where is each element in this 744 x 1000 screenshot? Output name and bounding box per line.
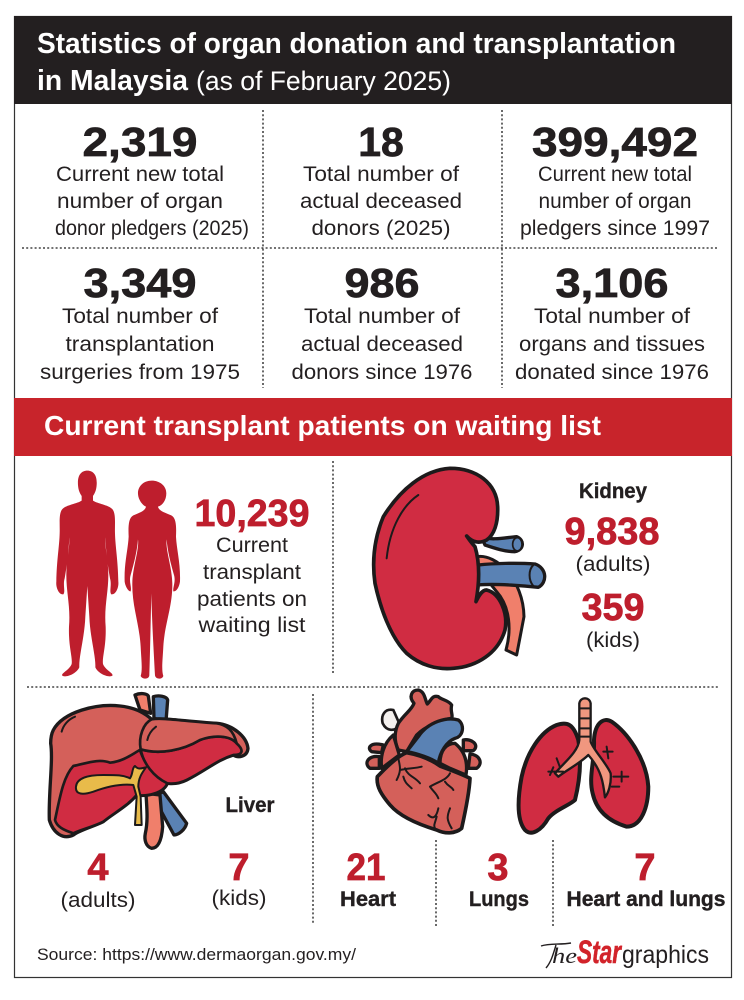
stat: total waiting patients: 10,239 bbox=[194, 493, 310, 535]
stat: liver bbox=[60, 794, 274, 912]
stat: organs and tissues donated: Total number of bbox=[534, 305, 690, 328]
stat: kidney: (adults) bbox=[576, 553, 650, 576]
title banner: in Malaysia bbox=[37, 65, 189, 97]
stat: lungs bbox=[469, 847, 529, 911]
stat: liver: (kids) bbox=[212, 887, 266, 910]
logo: The Star graphics: graphics bbox=[622, 941, 709, 969]
stat: liver: 4 bbox=[87, 847, 109, 889]
stat: heart and lungs: Heart and lungs bbox=[566, 888, 726, 911]
icon: kidney bbox=[374, 468, 545, 669]
stat: transplantation surgeries: transplantation bbox=[66, 333, 214, 356]
stat: liver: 7 bbox=[228, 847, 250, 889]
stat: organ pledgers since 1997: pledgers since 1997 bbox=[520, 217, 710, 240]
logo: The Star graphics bbox=[541, 934, 709, 970]
stat: organs and tissues donated bbox=[515, 260, 709, 384]
stat: organ pledgers since 1997: Current new total bbox=[538, 163, 692, 186]
stat: liver: (adults) bbox=[60, 889, 136, 912]
stat: heart: 21 bbox=[346, 847, 386, 889]
stat: kidney: (kids) bbox=[586, 629, 640, 652]
stat: total waiting patients: Current bbox=[216, 534, 288, 557]
stat: total waiting patients bbox=[194, 493, 310, 637]
stat: transplantation surgeries: surgeries from 1975 bbox=[40, 361, 240, 384]
stat: transplantation surgeries: Total number of bbox=[62, 305, 218, 328]
stat: lungs: Lungs bbox=[469, 888, 529, 911]
source: Source: https://www.dermaorgan.gov.my/ bbox=[37, 946, 356, 964]
stat: transplantation surgeries: 3,349 bbox=[84, 260, 196, 306]
stat: kidney: 9,838 bbox=[564, 511, 660, 553]
stat: heart: Heart bbox=[340, 888, 396, 911]
stat: organ donor pledgers 2025: Current new total bbox=[56, 163, 224, 186]
stat: organ pledgers since 1997: 399,492 bbox=[532, 119, 698, 165]
stat: deceased donors since 1976: Total number of bbox=[304, 305, 460, 328]
title banner bbox=[14, 16, 732, 104]
stat: organs and tissues donated: organs and tissues bbox=[519, 333, 705, 356]
icon: liver bbox=[49, 694, 248, 848]
stat: organ donor pledgers 2025: 2,319 bbox=[82, 119, 198, 165]
logo: The Star graphics: Star bbox=[577, 934, 622, 970]
stat: kidney bbox=[564, 480, 660, 652]
stat: lungs: 3 bbox=[487, 847, 509, 889]
stat: deceased donors since 1976 bbox=[292, 260, 472, 384]
stat: organ donor pledgers 2025: donor pledgers (2025) bbox=[55, 217, 249, 240]
title banner: (as of February 2025) bbox=[196, 66, 451, 96]
stat: organs and tissues donated: 3,106 bbox=[556, 260, 668, 306]
icon: human silhouettes bbox=[56, 471, 180, 679]
title banner: Statistics of organ donation and transplantation bbox=[37, 28, 676, 60]
stat: total waiting patients: waiting list bbox=[197, 614, 306, 637]
stat: heart bbox=[340, 847, 396, 911]
stat: deceased donors since 1976: actual deceased bbox=[301, 333, 463, 356]
stat: deceased donors since 1976: donors since 1976 bbox=[292, 361, 472, 384]
stat: liver: Liver bbox=[226, 794, 274, 817]
stat: organ pledgers since 1997 bbox=[520, 119, 710, 240]
waiting list banner bbox=[14, 398, 732, 456]
stat: organs and tissues donated: donated since 1976 bbox=[515, 361, 709, 384]
stat: actual deceased donors 2025: 18 bbox=[358, 119, 404, 165]
stat: organ donor pledgers 2025: number of organ bbox=[57, 190, 223, 213]
stat: total waiting patients: transplant bbox=[203, 561, 301, 584]
stat: deceased donors since 1976: 986 bbox=[344, 260, 420, 306]
stat: kidney: Kidney bbox=[579, 480, 647, 503]
stat: kidney: 359 bbox=[582, 587, 644, 629]
stat: total waiting patients: patients on bbox=[197, 588, 307, 611]
icon: heart bbox=[367, 690, 480, 833]
stat: heart and lungs bbox=[566, 847, 726, 911]
stat: actual deceased donors 2025 bbox=[300, 119, 462, 240]
stat: actual deceased donors 2025: actual deceased bbox=[300, 190, 462, 213]
icon: lungs bbox=[519, 698, 648, 833]
stat: actual deceased donors 2025: donors (2025) bbox=[312, 217, 450, 240]
stat: organ donor pledgers 2025 bbox=[55, 119, 249, 240]
stat: organ pledgers since 1997: number of organ bbox=[538, 190, 692, 213]
waiting list banner: Current transplant patients on waiting list bbox=[44, 410, 601, 441]
stat: heart and lungs: 7 bbox=[634, 847, 656, 889]
logo: The Star graphics: he bbox=[552, 943, 577, 968]
stat: actual deceased donors 2025: Total number of bbox=[303, 163, 459, 186]
stat: transplantation surgeries bbox=[40, 260, 240, 384]
